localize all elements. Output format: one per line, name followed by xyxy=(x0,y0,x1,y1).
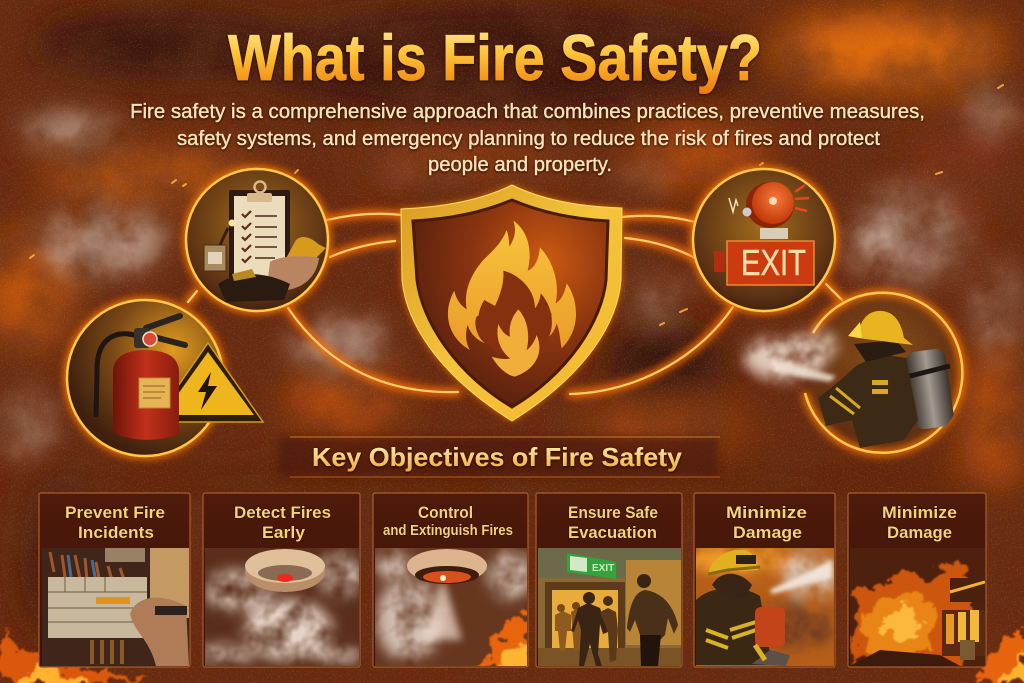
intro paragraph: people and property. xyxy=(428,154,612,176)
card heading xyxy=(234,503,331,542)
card heading xyxy=(568,503,658,542)
card heading: Early xyxy=(262,523,306,542)
heading band: key objectives xyxy=(278,437,720,477)
icon: clipboard with checklist xyxy=(204,182,326,302)
embers xyxy=(30,85,1003,335)
water spray from firefighter xyxy=(743,331,837,382)
image: building on fire xyxy=(850,548,985,666)
card heading: Damage xyxy=(887,523,952,542)
heading band: key objectives: Key Objectives of Fire Safety xyxy=(312,442,683,472)
image: smoke detector in smoke xyxy=(197,548,364,666)
icon: shield flame xyxy=(448,221,576,377)
panel: alarm and exit circle xyxy=(690,166,838,314)
panel: control and extinguish fires xyxy=(373,493,532,667)
image: electrical panel inspection xyxy=(42,548,189,666)
panel: minimize damage firefighter xyxy=(680,493,836,667)
panel: detect fires early xyxy=(197,493,364,667)
panel: minimize damage burning building xyxy=(848,493,986,667)
card heading: Minimize xyxy=(882,503,957,522)
icon: firefighter xyxy=(818,311,955,448)
central shield with flame xyxy=(401,185,622,421)
card heading xyxy=(383,503,513,539)
icon: fire alarm bell xyxy=(729,182,809,239)
card heading: Incidents xyxy=(78,523,154,542)
card heading: Damage xyxy=(733,523,802,542)
image: firefighter with extinguisher xyxy=(696,548,834,666)
card heading: Control xyxy=(418,503,473,522)
icon: electrical hazard triangle xyxy=(153,343,263,422)
icon: exit sign xyxy=(714,241,814,285)
card heading: Prevent Fire xyxy=(65,503,165,522)
image: people evacuating under exit sign xyxy=(538,548,681,666)
image: people evacuating under exit sign: EXIT xyxy=(592,563,614,574)
panel: extinguisher and electrical hazard circle xyxy=(64,297,263,459)
card heading xyxy=(726,503,807,542)
intro paragraph: safety systems, and emergency planning to reduce the risk of fires and protect xyxy=(177,128,880,150)
image: sprinkler spraying xyxy=(375,548,532,666)
panel: ensure safe evacuation xyxy=(536,493,682,667)
intro paragraph xyxy=(130,101,925,176)
panel: prevent fire incidents xyxy=(39,493,190,667)
icon: fire extinguisher xyxy=(96,316,185,440)
card heading xyxy=(65,503,165,542)
card heading: Minimize xyxy=(726,503,807,522)
card heading: Detect Fires xyxy=(234,503,331,522)
card heading: and Extinguish Fires xyxy=(383,522,513,539)
flames at the bottom corners xyxy=(0,625,1024,683)
card heading: Evacuation xyxy=(568,523,657,542)
card heading xyxy=(882,503,957,542)
panel: clipboard inspection circle xyxy=(183,166,331,314)
intro paragraph: Fire safety is a comprehensive approach that combines practices, preventive measures, xyxy=(130,101,925,123)
title: What is Fire Safety? xyxy=(228,21,762,94)
icon: exit sign: EXIT xyxy=(741,242,806,283)
glowing connector lines xyxy=(188,214,842,394)
card heading: Ensure Safe xyxy=(568,503,658,522)
panel: firefighter circle xyxy=(805,293,964,455)
